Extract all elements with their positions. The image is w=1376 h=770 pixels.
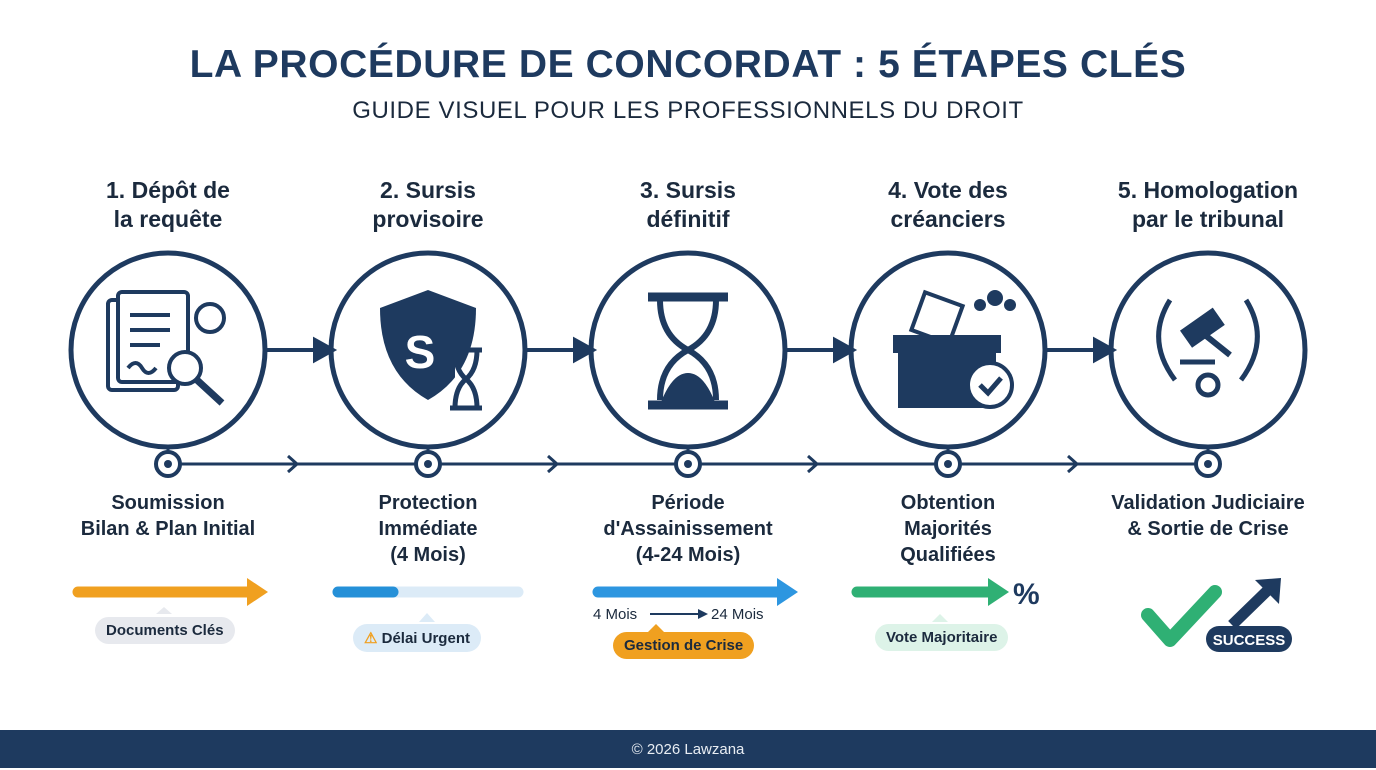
icon: ballot box [893, 290, 1016, 408]
desc 2: Immédiate [379, 518, 477, 540]
arrows between circles [265, 340, 1113, 360]
pill: gestion de crise [613, 632, 754, 659]
progress bar [338, 592, 518, 622]
title step 5 [1118, 177, 1298, 232]
pill: delai urgent: ⚠ Délai Urgent [364, 630, 470, 647]
desc 5: & Sortie de Crise [1127, 518, 1289, 540]
desc 4 [900, 492, 996, 566]
desc 1 [81, 492, 255, 540]
title step 3: 3. Sursis [640, 177, 736, 203]
title step 5: par le tribunal [1132, 206, 1284, 232]
timeline [168, 447, 1208, 472]
icon: shield: S [405, 326, 435, 378]
desc 2: Protection [379, 492, 477, 514]
desc 4: Majorités [904, 518, 992, 540]
green arrow: % [1013, 578, 1040, 611]
title step 1: la requête [114, 206, 222, 232]
title step 4: créanciers [890, 206, 1006, 232]
orange arrow [78, 578, 268, 614]
step titles [106, 177, 1298, 232]
desc 5 [1111, 492, 1305, 540]
title step 2: provisoire [372, 206, 484, 232]
blue arrow [593, 578, 798, 632]
desc 3: Période [651, 492, 725, 514]
title step 2: 2. Sursis [380, 177, 476, 203]
footer: © 2026 Lawzana [632, 741, 744, 758]
pill: vote majoritaire: Vote Majoritaire [886, 629, 997, 646]
desc 1: Soumission [111, 492, 225, 514]
title step 2 [372, 177, 484, 232]
desc 3: d'Assainissement [603, 518, 773, 540]
title: LA PROCÉDURE DE CONCORDAT : 5 ÉTAPES CLÉS [190, 43, 1186, 86]
footer [0, 730, 1376, 768]
icon: gavel laurel [1159, 300, 1257, 395]
desc 2: (4 Mois) [390, 544, 466, 566]
title step 3: définitif [646, 206, 730, 232]
success icon: SUCCESS [1213, 632, 1285, 649]
pill: documents cles [95, 617, 235, 644]
icon: shield [380, 290, 482, 408]
desc 1: Bilan & Plan Initial [81, 518, 255, 540]
icon: documents [108, 292, 224, 403]
pill: delai urgent [353, 624, 481, 652]
title step 3 [640, 177, 736, 232]
blue arrow: 4 Mois [593, 606, 637, 623]
success icon [1148, 578, 1292, 652]
title step 4 [888, 177, 1008, 232]
title step 4: 4. Vote des [888, 177, 1008, 203]
title step 5: 5. Homologation [1118, 177, 1298, 203]
desc 3: (4-24 Mois) [636, 544, 740, 566]
pill: vote majoritaire [875, 624, 1008, 651]
desc 2 [379, 492, 477, 566]
desc 4: Obtention [901, 492, 995, 514]
desc 5: Validation Judiciaire [1111, 492, 1305, 514]
subtitle: GUIDE VISUEL POUR LES PROFESSIONNELS DU DROIT [352, 97, 1024, 124]
pill: gestion de crise: Gestion de Crise [624, 637, 743, 654]
blue arrow: 24 Mois [711, 606, 764, 623]
descriptions [81, 492, 1305, 566]
desc 3 [603, 492, 773, 566]
pill: documents cles: Documents Clés [106, 622, 224, 639]
icon: hourglass [648, 297, 728, 405]
desc 4: Qualifiées [900, 544, 996, 566]
title step 1 [106, 177, 230, 232]
title step 1: 1. Dépôt de [106, 177, 230, 203]
green arrow [857, 578, 1040, 622]
